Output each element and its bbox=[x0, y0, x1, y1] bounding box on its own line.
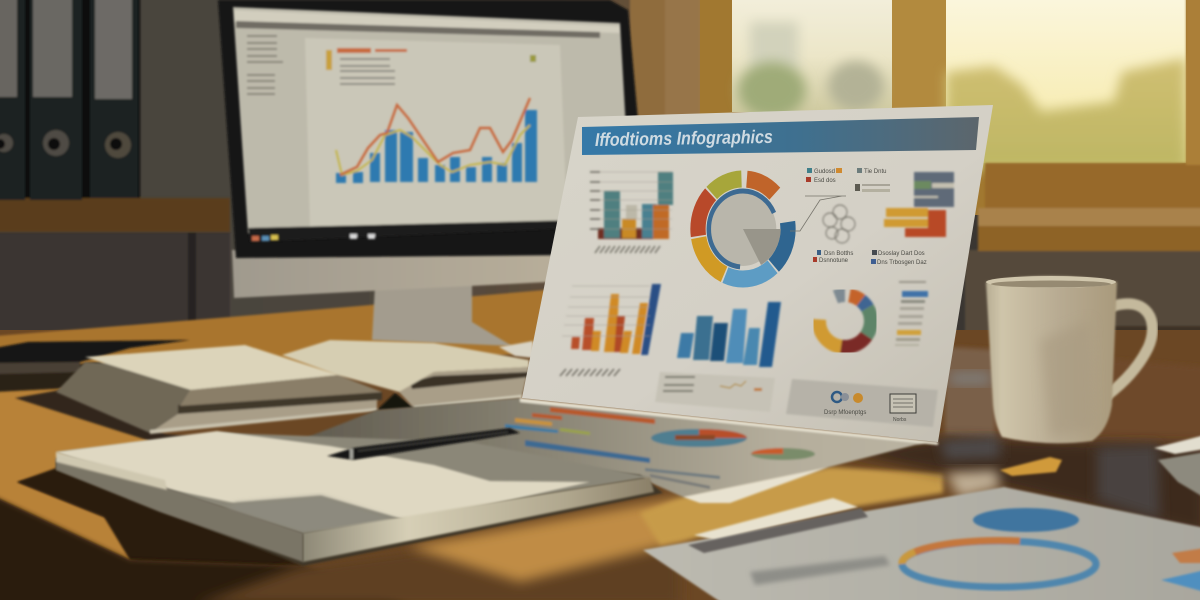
card title bar bbox=[582, 117, 979, 155]
notebook bbox=[56, 428, 663, 566]
book shadow on desk bbox=[15, 390, 230, 462]
notebook left side bbox=[56, 460, 303, 562]
stacked bars top right bbox=[884, 172, 954, 237]
top legend: Esd dos bbox=[814, 178, 836, 184]
top legend: Dns Trbosgen Daz bbox=[877, 260, 927, 266]
monitor screen bbox=[233, 7, 630, 242]
monitor chin bbox=[232, 240, 560, 298]
shelf with binders bbox=[0, 0, 230, 232]
large donut chart bbox=[698, 179, 788, 279]
mug handle bbox=[1098, 304, 1152, 402]
flat report sheet on desk bbox=[300, 398, 938, 503]
top legend: Dsnnotune bbox=[819, 258, 849, 264]
sunlit wood on the left bbox=[0, 380, 173, 560]
monitor bbox=[218, 0, 638, 346]
sheet pie charts bbox=[651, 429, 815, 460]
notebook sunlit page bbox=[56, 431, 590, 522]
top legend: Tie Dntu bbox=[864, 169, 886, 175]
main infographic card bbox=[522, 105, 993, 442]
top legend: Dsoslay Dart Dos bbox=[878, 251, 925, 257]
dark lower-left corner bbox=[0, 497, 430, 600]
coffee mug bbox=[986, 276, 1152, 443]
mini table panel bbox=[655, 372, 775, 412]
white strip and header band bbox=[694, 498, 858, 540]
right desk wood bbox=[958, 347, 1200, 455]
phone on desk bbox=[0, 340, 190, 392]
card title: Iffodtioms Infographics bbox=[595, 126, 773, 150]
notebook page in shade bbox=[56, 433, 650, 533]
ring chart on sheet bbox=[902, 540, 1096, 587]
monitor stand bbox=[372, 280, 512, 346]
notebook shadow on desk bbox=[17, 468, 303, 566]
orange bar chart bbox=[560, 284, 661, 376]
top legend bbox=[806, 168, 927, 266]
small donut chart bbox=[819, 295, 871, 347]
top legend: Gudosd bbox=[814, 169, 835, 175]
sunlit patch at the front bbox=[408, 497, 690, 582]
book right block bbox=[399, 367, 529, 408]
open book bbox=[56, 340, 529, 434]
left top bar chart bbox=[590, 172, 673, 253]
sheet bars bbox=[505, 407, 720, 489]
desk surface bbox=[0, 290, 1200, 600]
left page bbox=[85, 345, 338, 390]
mug light crescent bbox=[1000, 457, 1062, 476]
donut leader line bbox=[790, 196, 846, 231]
monitor bezel bbox=[218, 0, 638, 258]
small white note behind book bbox=[499, 341, 533, 358]
room background wall bbox=[0, 0, 740, 350]
blue bar chart bbox=[677, 302, 781, 367]
card sheet bbox=[522, 105, 993, 442]
notebook shaded corner bbox=[222, 496, 405, 533]
mug body bbox=[986, 276, 1117, 443]
bottom callout panel with icons bbox=[786, 379, 938, 427]
notebook right side bbox=[303, 477, 654, 562]
window sill and lower wall bbox=[965, 0, 1200, 375]
window with sunlit trees bbox=[700, 0, 1200, 215]
cast shadow to the right bbox=[840, 438, 1200, 535]
small donut key list bbox=[895, 281, 928, 346]
bottom callout panel with icons: Norbs bbox=[893, 417, 907, 423]
notebook block bbox=[56, 433, 663, 566]
book left block bbox=[56, 362, 377, 433]
right page bbox=[282, 340, 529, 392]
network icon cluster bbox=[823, 205, 855, 243]
pen bbox=[327, 428, 520, 460]
book spine bbox=[377, 393, 414, 410]
top legend: Dsn Botths bbox=[824, 251, 853, 257]
corner paper and device bbox=[1154, 435, 1200, 498]
bottom right report sheet bbox=[643, 487, 1200, 600]
bottom callout panel with icons: Dsrp Mfoenptgs bbox=[824, 410, 866, 416]
monitor bar and line chart bbox=[336, 98, 537, 183]
blue badge on sheet bbox=[973, 508, 1079, 532]
